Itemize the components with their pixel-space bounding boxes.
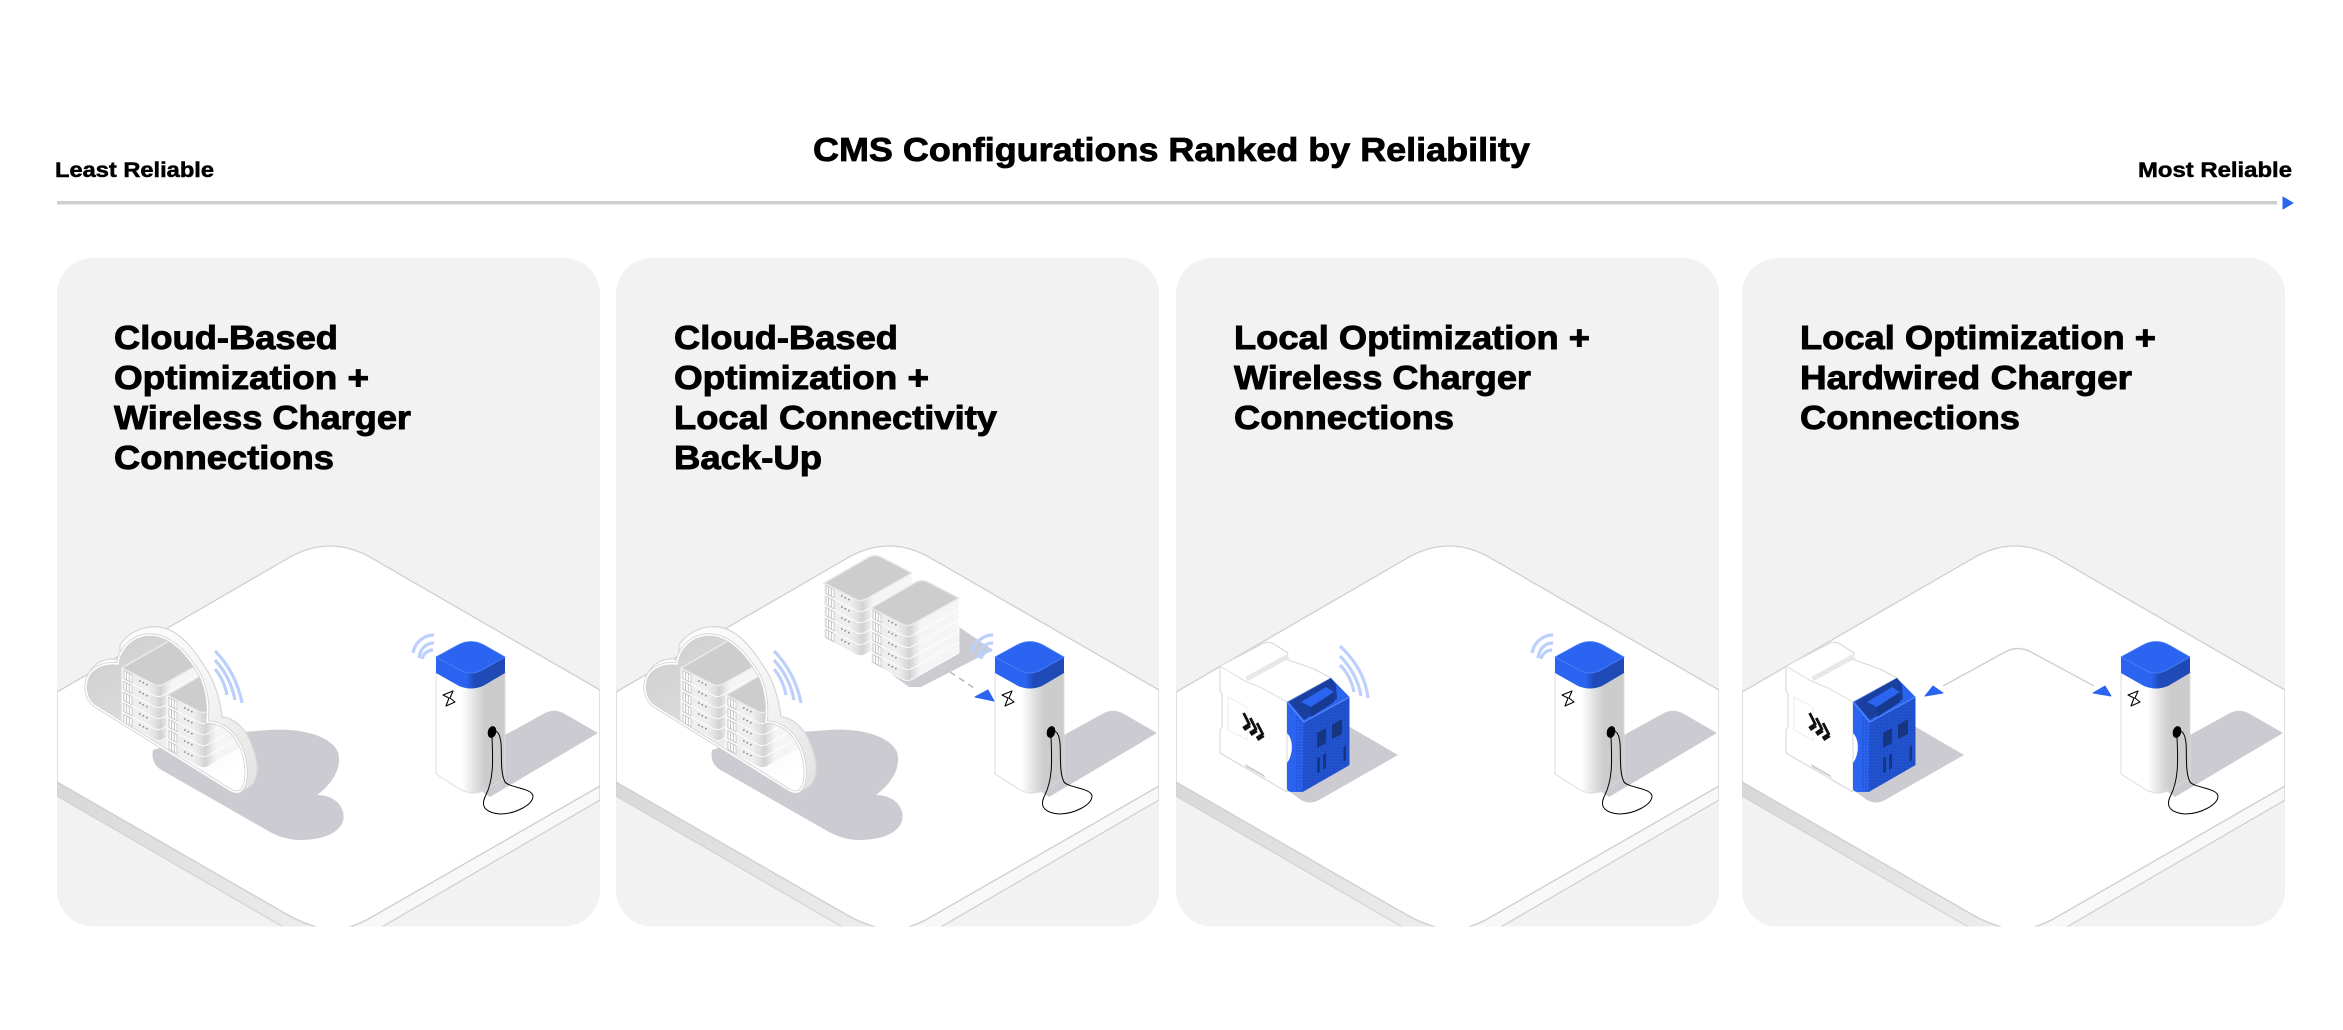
panel: cloud-based optimization with wireless connections [57,258,600,928]
heading: Local Connectivity [674,400,997,437]
heading: Connections [1234,400,1454,437]
wired connection arrow [1925,648,2111,696]
label: most reliable: Most Reliable [2138,159,2292,182]
platform [1176,258,1719,928]
heading: Cloud-Based [114,320,338,357]
panel: local optimization with wireless connections [1176,258,1719,928]
reliability arrow [57,197,2293,209]
icon: charger wifi [972,635,993,659]
heading [674,320,997,477]
heading: Optimization + [674,360,929,397]
panel: local optimization with hardwired connections [1742,258,2285,928]
icon: charger [436,642,598,814]
heading: Wireless Charger [114,400,411,437]
heading [114,320,411,477]
heading [1801,324,2155,430]
heading: Cloud-Based [674,320,898,357]
title: CMS Configurations Ranked by Reliability [813,132,1530,169]
heading [1234,320,1590,437]
heading: Connections [114,440,334,477]
icon: charger [995,642,1157,814]
icon: charger wifi [1532,635,1553,659]
platform [616,258,1159,928]
platform [1742,258,2285,928]
icon: charger [2121,642,2283,814]
icon: cloud with servers [645,627,903,840]
icon: local controller [1786,642,1964,802]
icon: local servers [824,556,993,687]
heading: Local Optimization + [1800,320,2156,357]
icon: charger wifi [413,635,434,659]
dashed connection arrow [950,672,994,701]
icon: local controller [1220,642,1398,802]
platform [57,258,600,928]
icon: charger [1555,642,1717,814]
heading: Hardwired Charger [1800,360,2132,397]
panel: cloud-based optimization with local back-up [616,258,1159,928]
icon: cloud with servers [86,627,344,840]
heading: Local Optimization + [1234,320,1590,357]
heading: Wireless Charger [1234,360,1531,397]
heading: Optimization + [114,360,369,397]
label: least reliable: Least Reliable [55,159,214,182]
heading: Connections [1800,400,2020,437]
heading: Back-Up [674,440,822,477]
icon: controller wifi [1340,646,1368,698]
